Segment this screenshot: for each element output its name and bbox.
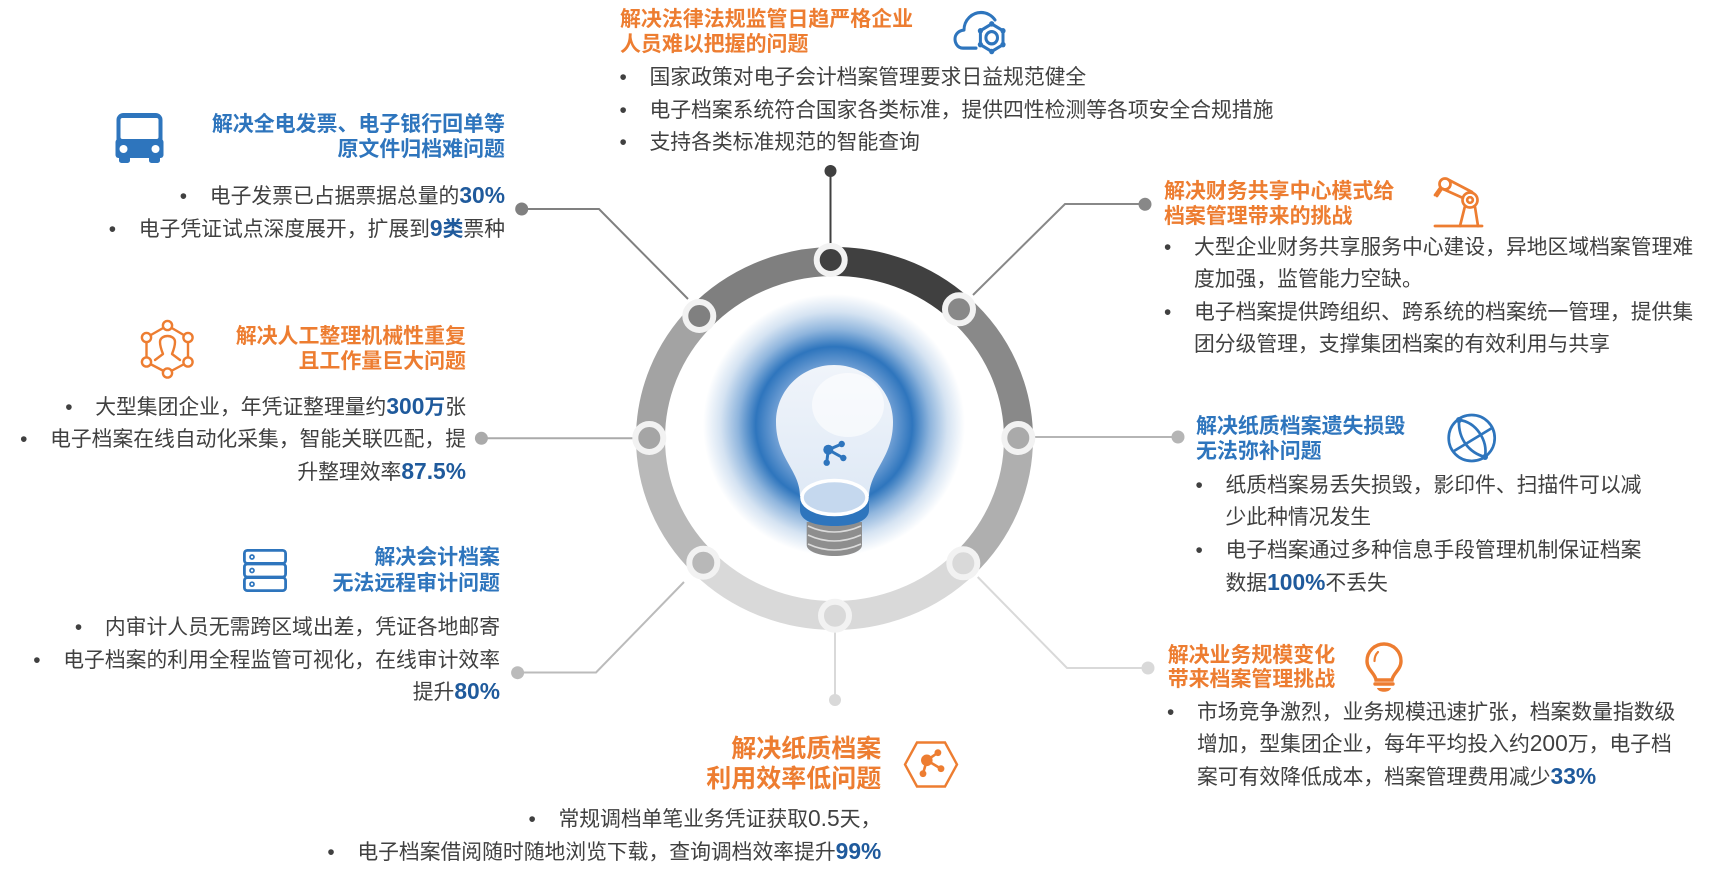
bullet list [33, 616, 500, 704]
bullet list: 纸质档案易丢失损毁，影印件、扫描件可以减 [1226, 474, 1641, 497]
icon: server stack [243, 549, 287, 592]
bullet list: 支持各类标准规范的智能查询 [650, 131, 920, 154]
icon: light bulb [1365, 642, 1403, 692]
heading: 带来档案管理挑战 [1168, 668, 1335, 691]
connector: top left [515, 202, 688, 299]
bullet list: • [1196, 539, 1203, 562]
bullet list: • [1164, 301, 1171, 324]
panel: paper loss [1196, 414, 1641, 595]
panel: business scale [1167, 642, 1675, 789]
bullet list: 数据100%不丢失 [1226, 569, 1388, 595]
bullet list: 电子档案在线自动化采集，智能关联匹配，提 [50, 428, 466, 451]
icon: hexagon share [904, 741, 958, 788]
bullet list: 增加，型集团企业，每年平均投入约200万，电子档 [1197, 730, 1672, 756]
bullet list [1167, 701, 1675, 789]
panel: paper utilisation [327, 735, 958, 864]
bullet list: • [33, 649, 41, 672]
bullet list: 升整理效率87.5% [297, 458, 466, 484]
bullet list: 提升80% [413, 678, 500, 704]
connector: bottom right [978, 577, 1154, 674]
bullet list: • [327, 841, 335, 864]
heading: 解决业务规模变化 [1168, 644, 1335, 667]
panel: remote audit [33, 546, 500, 704]
heading: 档案管理带来的挑战 [1164, 205, 1352, 228]
bullet list: • [1196, 474, 1203, 497]
panel: legal compliance [620, 8, 1273, 154]
heading [620, 8, 913, 56]
heading: 解决纸质档案遗失损毁 [1196, 415, 1405, 438]
bullet list: 团分级管理，支撑集团档案的有效利用与共享 [1194, 333, 1610, 356]
bullet list: 电子凭证试点深度展开，扩展到9类票种 [139, 215, 505, 241]
panel: original file archiving [109, 112, 505, 241]
bullet list: • [1167, 701, 1174, 724]
bullet list: 国家政策对电子会计档案管理要求日益规范健全 [650, 66, 1086, 89]
heading: 原文件归档难问题 [338, 138, 505, 161]
heading: 解决法律法规监管日趋严格企业 [620, 8, 913, 31]
connector: top right [973, 198, 1152, 295]
bullet list: 电子档案通过多种信息手段管理机制保证档案 [1226, 539, 1641, 562]
bullet list [1164, 236, 1693, 356]
connector: bottom [829, 630, 841, 706]
bullet list: • [65, 396, 72, 419]
bullet list: • [620, 131, 627, 154]
heading: 无法远程审计问题 [332, 572, 500, 595]
ring segments [650, 261, 1018, 616]
icon: cloud gear [954, 10, 1006, 54]
heading: 解决财务共享中心模式给 [1164, 180, 1394, 203]
heading: 且工作量巨大问题 [298, 350, 466, 373]
bullet list: • [109, 218, 116, 241]
bullet list: 度加强，监管能力空缺。 [1194, 268, 1423, 291]
bullet list: 电子档案的利用全程监管可视化，在线审计效率 [63, 649, 500, 672]
bullet list: • [620, 66, 627, 89]
heading [236, 324, 466, 373]
bullet list: • [528, 808, 536, 831]
heading [332, 546, 500, 595]
heading [212, 112, 505, 161]
icon: bus [116, 113, 164, 163]
panel: manual sorting [20, 320, 466, 484]
bullet list: • [620, 99, 627, 122]
bullet list: 电子档案借阅随时随地浏览下载，查询调档效率提升99% [357, 838, 881, 864]
connector: right [1033, 430, 1184, 444]
icon: globe [1447, 414, 1496, 462]
bullet list [327, 805, 881, 864]
heading: 解决人工整理机械性重复 [236, 325, 466, 348]
bullet list: • [20, 428, 27, 451]
heading [1196, 414, 1405, 463]
icon: person network [140, 320, 194, 379]
bullet list: • [180, 185, 187, 208]
light bulb [776, 365, 893, 556]
bullet list [620, 66, 1273, 154]
bullet list: 市场竞争激烈，业务规模迅速扩张，档案数量指数级 [1197, 701, 1675, 724]
bullet list [20, 393, 466, 484]
bullet list: 案可有效降低成本，档案管理费用减少33% [1197, 763, 1596, 789]
ring nodes [635, 246, 1032, 630]
bullet list [1196, 474, 1641, 595]
heading: 人员难以把握的问题 [620, 33, 808, 56]
bullet list: 大型企业财务共享服务中心建设，异地区域档案管理难 [1194, 236, 1693, 259]
bullet list: 少此种情况发生 [1226, 506, 1371, 529]
heading: 解决会计档案 [374, 546, 500, 569]
bullet list: 大型集团企业，年凭证整理量约300万张 [95, 393, 466, 419]
connector: bottom left [511, 582, 684, 679]
bullet list: 内审计人员无需跨区域出差，凭证各地邮寄 [105, 616, 500, 639]
connector: left [475, 432, 635, 445]
bullet list: 电子档案提供跨组织、跨系统的档案统一管理，提供集 [1194, 301, 1693, 324]
heading [706, 735, 881, 793]
bullet list: • [75, 616, 82, 639]
bullet list: 常规调档单笔业务凭证获取0.5天， [558, 805, 881, 831]
connector: top [824, 165, 836, 245]
heading [1164, 180, 1394, 228]
icon: robot arm [1434, 177, 1484, 228]
heading: 无法弥补问题 [1196, 440, 1322, 463]
bullet list [109, 182, 505, 241]
heading: 解决全电发票、电子银行回单等 [212, 113, 505, 136]
panel: shared service centre [1164, 177, 1693, 356]
glow behind bulb [699, 290, 969, 560]
heading: 利用效率低问题 [706, 765, 881, 793]
heading: 解决纸质档案 [731, 735, 881, 763]
heading [1168, 644, 1335, 691]
bullet list: 电子发票已占据票据总量的30% [210, 182, 505, 208]
bullet list: • [1164, 236, 1171, 259]
bullet list: 电子档案系统符合国家各类标准，提供四性检测等各项安全合规措施 [650, 99, 1273, 122]
